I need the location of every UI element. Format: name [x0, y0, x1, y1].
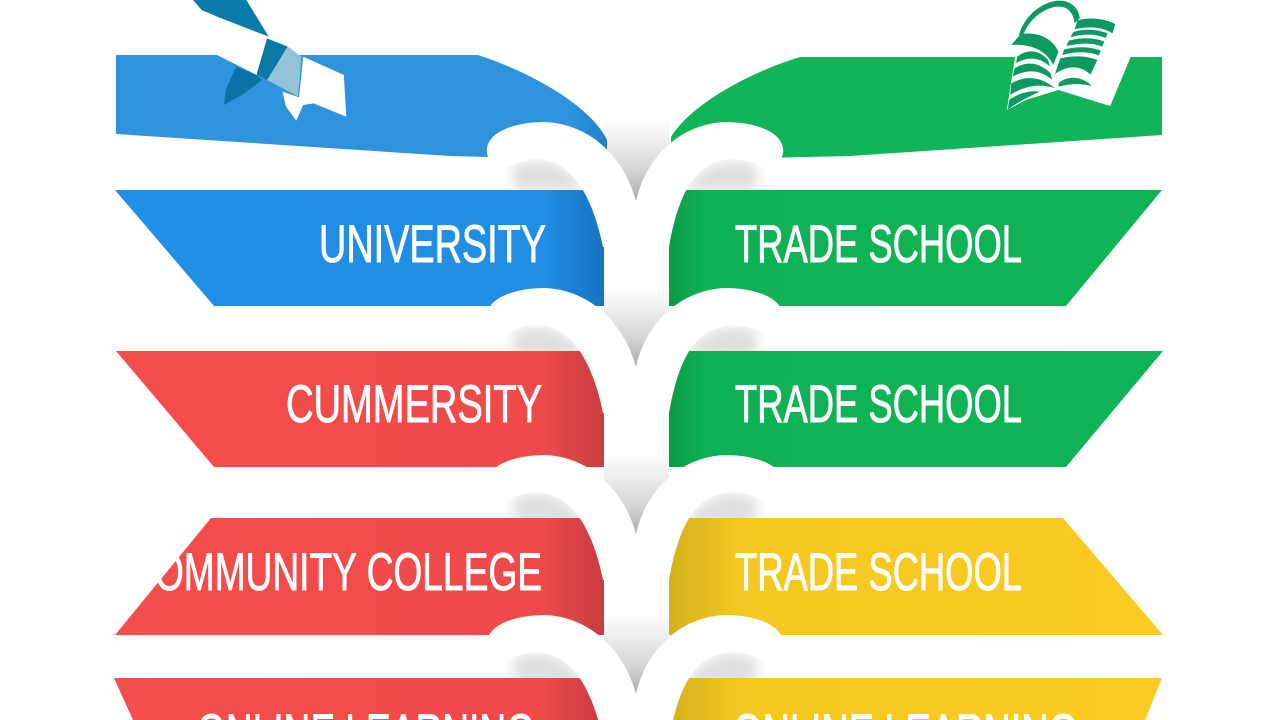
left band: Community (garbled)	[116, 351, 604, 467]
right column top band: green cover	[671, 57, 1162, 160]
white page curls	[487, 122, 783, 720]
icon: open book	[1007, 0, 1131, 110]
label: Trade School 3: TRADE SCHOOL	[735, 543, 1022, 602]
left band: Community College	[115, 518, 604, 635]
label: Trade School 2: TRADE SCHOOL	[735, 375, 1022, 434]
label: University: UNIVERSITY	[319, 215, 546, 274]
left band: University	[115, 190, 604, 306]
left column top band: blue cover	[116, 55, 607, 160]
label: Community College: COMMUNITY COLLEGE	[128, 543, 542, 602]
right band: Trade School 2	[669, 351, 1163, 467]
page curl shadows	[512, 161, 758, 683]
right band: Trade School 3	[669, 518, 1163, 635]
icon: pen	[193, 0, 346, 121]
left band: Online Learning	[114, 678, 604, 720]
label: Trade School 1: TRADE SCHOOL	[735, 215, 1022, 274]
right band: Online Learning	[669, 678, 1162, 720]
right band: Trade School 1	[669, 190, 1162, 306]
book spine gutter shading	[604, 118, 669, 697]
label: Cummersity: CUMMERSITY	[286, 375, 542, 434]
